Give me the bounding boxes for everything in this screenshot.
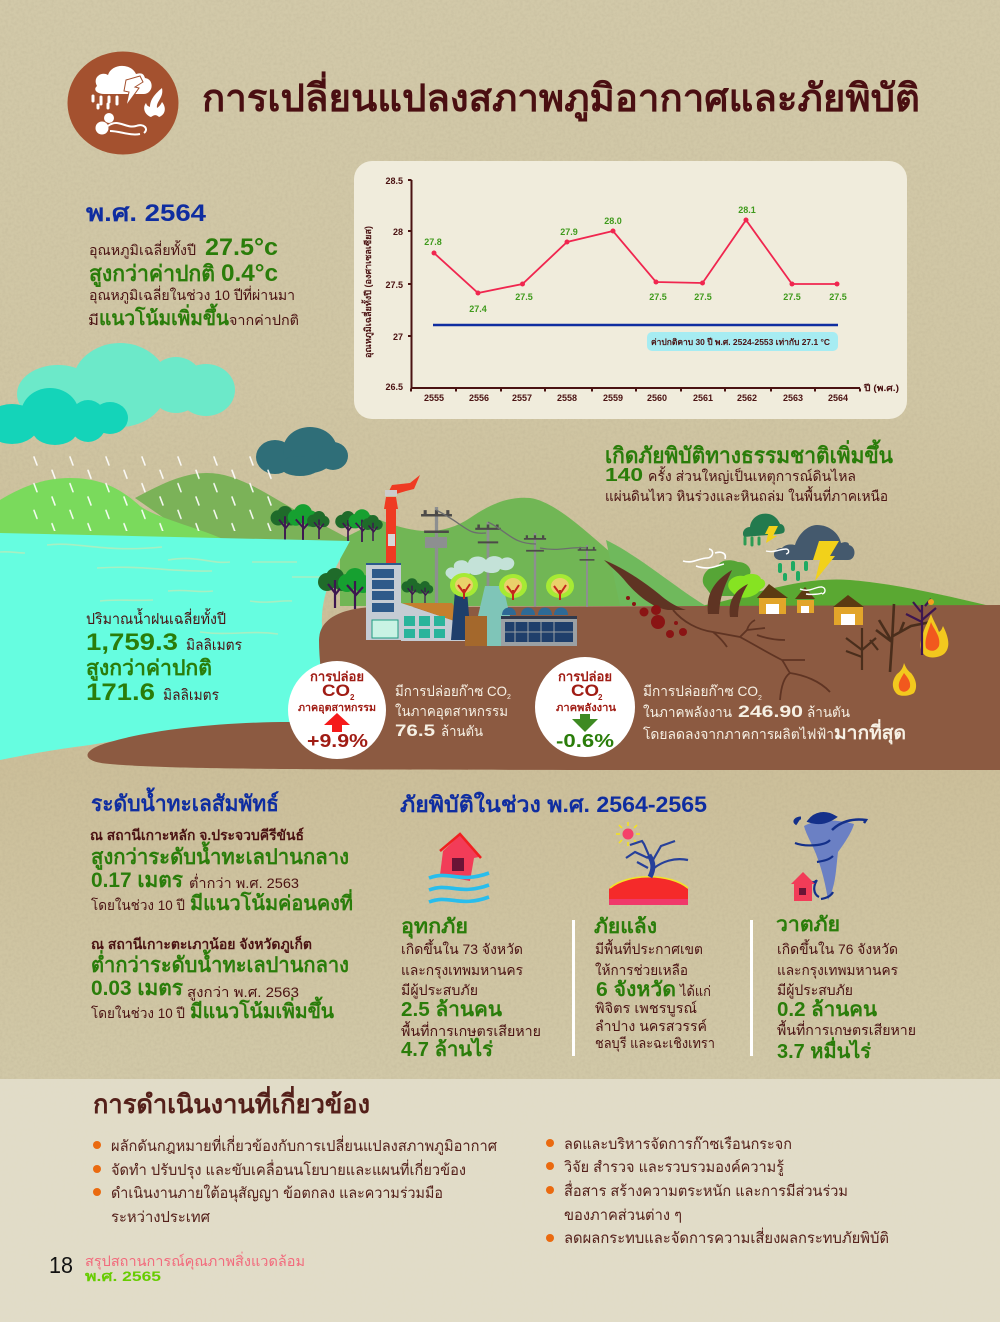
text block: energy CO2: มีการปล่อยก๊าซ CO: [643, 683, 758, 699]
icon: drought: [609, 822, 688, 905]
x axis title: ปี (พ.ศ.): [863, 383, 899, 393]
panel: relative sea level: ณ สถานีเกาะหลัก จ.ประจวบคีรีขันธ์: [90, 827, 304, 843]
x axis labels: 2559: [603, 393, 623, 403]
text block: industry CO2: ล้านตัน: [441, 723, 483, 739]
value labels: 27.8: [424, 237, 442, 247]
text block: temperature 2564: จากค่าปกติ: [229, 312, 299, 328]
text block: drought: ได้แก่: [679, 983, 711, 999]
value labels: 28.1: [738, 205, 756, 215]
divider: [750, 920, 753, 1056]
right list: ของภาคส่วนต่าง ๆ: [564, 1207, 682, 1224]
footer: [49, 1252, 305, 1284]
text block: energy CO2: 246.90: [738, 702, 803, 721]
value labels: 27.9: [560, 227, 578, 237]
baseline line: [433, 324, 838, 326]
panel: relative sea level: โดยในช่วง 10 ปี: [91, 897, 185, 913]
text block: drought: มีพื้นที่ประกาศเขต: [595, 939, 703, 957]
value labels: 27.5: [829, 292, 847, 302]
panel: relative sea level: มีแนวโน้มเพิ่มขึ้น: [190, 996, 334, 1023]
text block: temperature 2564: อุณหภูมิเฉลี่ยในช่วง 10 ปีที่ผ่านมา: [89, 286, 295, 304]
text block: storm: วาตภัย: [776, 914, 840, 936]
title: การเปลี่ยนแปลงสภาพภูมิอากาศและภัยพิบัติ: [202, 71, 920, 122]
callout: normal value: ค่าปกติคาบ 30 ปี พ.ศ. 2524-2553 เท่ากับ 27.1 °C: [651, 337, 830, 347]
x axis labels: 2555: [424, 393, 444, 403]
y axis title: อุณหภูมิเฉลี่ยทั้งปี (องศาเซลเซียส): [361, 226, 374, 358]
panel: relative sea level: ต่ำกว่า พ.ศ. 2563: [189, 874, 299, 891]
x axis labels: 2562: [737, 393, 757, 403]
text block: rainfall: [86, 608, 242, 706]
text block: drought: [594, 915, 715, 1052]
text block: drought: ชลบุรี และฉะเชิงเทรา: [595, 1035, 715, 1052]
right list: วิจัย สำรวจ และรวบรวมองค์ความรู้: [563, 1159, 784, 1176]
badge: energy CO2 -0.6%: 2: [598, 693, 603, 702]
text block: flood: และกรุงเทพมหานคร: [401, 962, 523, 979]
text block: storm: 3.7 หมื่นไร่: [777, 1036, 871, 1063]
text block: energy CO2: โดยลดลงจากภาคการผลิตไฟฟ้า: [643, 726, 834, 742]
text block: temperature 2564: พ.ศ. 2564: [86, 200, 207, 227]
text block: flood: มีผู้ประสบภัย: [401, 982, 478, 999]
text block: energy CO2: ล้านตัน: [807, 704, 850, 720]
icon: climate and disasters: [68, 52, 178, 154]
x axis labels: 2557: [512, 393, 532, 403]
y axis labels: 27.5: [385, 280, 403, 290]
text block: natural disaster summary: 140: [605, 465, 643, 485]
badge: energy CO2 -0.6%: ภาคพลังงาน: [556, 702, 616, 714]
panel: relative sea level: 0.03 เมตร: [91, 977, 184, 1000]
illustration: factory: [366, 475, 577, 646]
text block: temperature 2564: สูงกว่าค่าปกติ: [89, 261, 215, 288]
panel: related operations: [93, 1085, 889, 1247]
right list: ลดและบริหารจัดการก๊าซเรือนกระจก: [564, 1136, 792, 1153]
illustration: green hills behind factory: [340, 498, 990, 606]
panel: temperature line chart: [354, 161, 907, 419]
right list: [546, 1136, 889, 1247]
text block: rainfall: ปริมาณน้ำฝนเฉลี่ยทั้งปี: [86, 608, 226, 628]
illustration: brown ground: [88, 605, 1000, 770]
icon: flood: [429, 834, 489, 902]
y axis labels: 27: [393, 332, 403, 342]
text block: storm: พื้นที่การเกษตรเสียหาย: [777, 1020, 916, 1038]
text block: rainfall: 171.6: [86, 679, 155, 706]
text block: rainfall: สูงกว่าค่าปกติ: [86, 657, 212, 682]
text block: rainfall: มิลลิเมตร: [186, 637, 242, 654]
y axis labels: 28.5: [385, 176, 403, 186]
heading: การดำเนินงานที่เกี่ยวข้อง: [93, 1085, 370, 1119]
text block: industry CO2: 2: [507, 694, 511, 701]
value labels: 27.5: [694, 292, 712, 302]
illustration: lake: [0, 533, 350, 760]
value labels: 27.5: [649, 292, 667, 302]
text block: temperature 2564: 27.5°c: [205, 234, 278, 261]
bottom panel background: [0, 1079, 1000, 1322]
left list: จัดทำ ปรับปรุง และขับเคลื่อนนโยบายและแผนที่เกี่ยวข้อง: [111, 1159, 466, 1180]
illustration: rain streaks: [20, 456, 285, 531]
text block: rainfall: มิลลิเมตร: [163, 687, 219, 704]
divider: [572, 920, 575, 1056]
badge: energy CO2 -0.6%: การปล่อย: [558, 669, 612, 684]
text block: flood: 2.5 ล้านคน: [401, 998, 502, 1021]
panel: relative sea level: มีแนวโน้มค่อนคงที่: [190, 888, 353, 915]
y axis labels: [385, 176, 403, 392]
badge: energy CO2 -0.6%: [535, 657, 635, 757]
text block: energy CO2: [643, 683, 906, 745]
text block: flood: พื้นที่การเกษตรเสียหาย: [401, 1021, 541, 1039]
illustration: clouds: [0, 343, 348, 476]
callout: normal value: [647, 332, 838, 351]
footer: สรุปสถานการณ์คุณภาพสิ่งแวดล้อม: [85, 1252, 305, 1270]
badge: industry CO2 +9.9%: CO: [322, 681, 350, 700]
value labels: 28.0: [604, 216, 622, 226]
footer: พ.ศ. 2565: [85, 1268, 161, 1284]
text block: drought: 6 จังหวัด: [596, 979, 676, 1001]
text block: storm: 0.2 ล้านคน: [777, 998, 877, 1021]
badge: energy CO2 -0.6%: CO: [571, 681, 599, 700]
text block: storm: มีผู้ประสบภัย: [777, 982, 853, 999]
text block: drought: พิจิตร เพชรบูรณ์: [595, 1000, 697, 1017]
heading: disasters 2564-2565: ภัยพิบัติในช่วง พ.ศ. 2564-2565: [400, 791, 707, 817]
badge: industry CO2 +9.9%: การปล่อย: [310, 669, 364, 684]
text block: drought: ให้การช่วยเหลือ: [595, 962, 688, 978]
x axis labels: 2563: [783, 393, 803, 403]
text block: temperature 2564: [86, 200, 299, 330]
panel: relative sea level: โดยในช่วง 10 ปี: [91, 1005, 185, 1021]
right list: ลดผลกระทบและจัดการความเสี่ยงผลกระทบภัยพิบัติ: [564, 1227, 889, 1247]
illustration: trees near factory: [318, 568, 433, 609]
text block: storm: เกิดขึ้นใน 76 จังหวัด: [777, 939, 898, 957]
panel: relative sea level: ณ สถานีเกาะตะเภาน้อย จังหวัดภูเก็ต: [91, 935, 312, 953]
right list: สื่อสาร สร้างความตระหนัก และการมีส่วนร่วม: [564, 1180, 848, 1200]
text block: temperature 2564: อุณหภูมิเฉลี่ยทั้งปี: [89, 240, 196, 259]
illustration: power poles: [421, 507, 596, 610]
text block: industry CO2: 76.5: [395, 721, 435, 740]
text block: industry CO2: [395, 683, 511, 740]
badge: industry CO2 +9.9%: [288, 661, 386, 759]
text block: rainfall: 1,759.3: [86, 629, 178, 656]
text block: flood: 4.7 ล้านไร่: [401, 1037, 493, 1061]
text block: energy CO2: ในภาคพลังงาน: [643, 704, 732, 720]
text block: industry CO2: ในภาคอุตสาหกรรม: [395, 703, 508, 720]
panel: relative sea level: ระดับน้ำทะเลสัมพัทธ์: [91, 787, 279, 816]
text block: storm: [776, 914, 916, 1063]
text block: drought: ลำปาง นครสวรรค์: [595, 1018, 707, 1034]
y axis labels: 26.5: [385, 382, 403, 392]
text block: flood: อุทกภัย: [401, 916, 468, 939]
text block: temperature 2564: มี: [88, 312, 99, 328]
x axis labels: 2564: [828, 393, 848, 403]
panel: relative sea level: [90, 787, 353, 1023]
left list: ระหว่างประเทศ: [111, 1209, 210, 1226]
footer: 18: [49, 1252, 73, 1278]
badge: industry CO2 +9.9%: 2: [350, 693, 355, 702]
text block: energy CO2: มากที่สุด: [834, 719, 906, 745]
badge: industry CO2 +9.9%: ภาคอุตสาหกรรม: [298, 703, 376, 714]
text block: natural disaster summary: แผ่นดินไหว หินร่วงและหินถล่ม ในพื้นที่ภาคเหนือ: [605, 486, 888, 504]
value labels: 27.5: [783, 292, 801, 302]
x axis labels: 2560: [647, 393, 667, 403]
left list: ดำเนินงานภายใต้อนุสัญญา ข้อตกลง และความร่วมมือ: [111, 1184, 443, 1203]
panel: relative sea level: สูงกว่าระดับน้ำทะเลปานกลาง: [91, 841, 349, 871]
text block: industry CO2: มีการปล่อยก๊าซ CO: [395, 683, 507, 699]
x axis labels: 2558: [557, 393, 577, 403]
text block: flood: เกิดขึ้นใน 73 จังหวัด: [401, 939, 523, 957]
chart axes: [408, 180, 860, 392]
panel: relative sea level: สูงกว่า พ.ศ. 2563: [187, 984, 299, 1001]
y axis labels: 28: [393, 227, 403, 237]
illustration: trees on far shore: [271, 504, 383, 542]
text block: storm: และกรุงเทพมหานคร: [777, 962, 898, 979]
value labels: [424, 205, 847, 314]
panel: relative sea level: ต่ำกว่าระดับน้ำทะเลปานกลาง: [91, 949, 349, 977]
illustration: hills behind lake: [0, 473, 357, 543]
text block: energy CO2: 2: [758, 695, 762, 702]
x axis labels: 2556: [469, 393, 489, 403]
value labels: 27.4: [469, 304, 487, 314]
text block: flood: [401, 916, 541, 1061]
left list: ผลักดันกฎหมายที่เกี่ยวข้องกับการเปลี่ยนแปลงสภาพภูมิอากาศ: [111, 1135, 497, 1155]
text block: natural disaster summary: เกิดภัยพิบัติทางธรรมชาติเพิ่มขึ้น: [605, 439, 893, 468]
value labels: 27.5: [515, 292, 533, 302]
text block: natural disaster summary: [605, 439, 893, 504]
text block: natural disaster summary: ครั้ง ส่วนใหญ่เป็นเหตุการณ์ดินไหล: [648, 466, 856, 485]
icon: storm: [791, 814, 866, 901]
temperature line: [432, 218, 840, 296]
text block: temperature 2564: แนวโน้มเพิ่มขึ้น: [99, 303, 229, 330]
left list: [93, 1135, 497, 1226]
x axis labels: 2561: [693, 393, 713, 403]
badge: energy CO2 -0.6%: -0.6%: [556, 731, 614, 751]
badge: industry CO2 +9.9%: +9.9%: [307, 731, 368, 751]
illustration: landslide, houses and storm: [604, 514, 948, 700]
text block: drought: ภัยแล้ง: [594, 915, 657, 938]
text block: temperature 2564: 0.4°c: [221, 260, 278, 287]
x axis labels: [424, 393, 848, 403]
panel: relative sea level: 0.17 เมตร: [91, 869, 184, 892]
